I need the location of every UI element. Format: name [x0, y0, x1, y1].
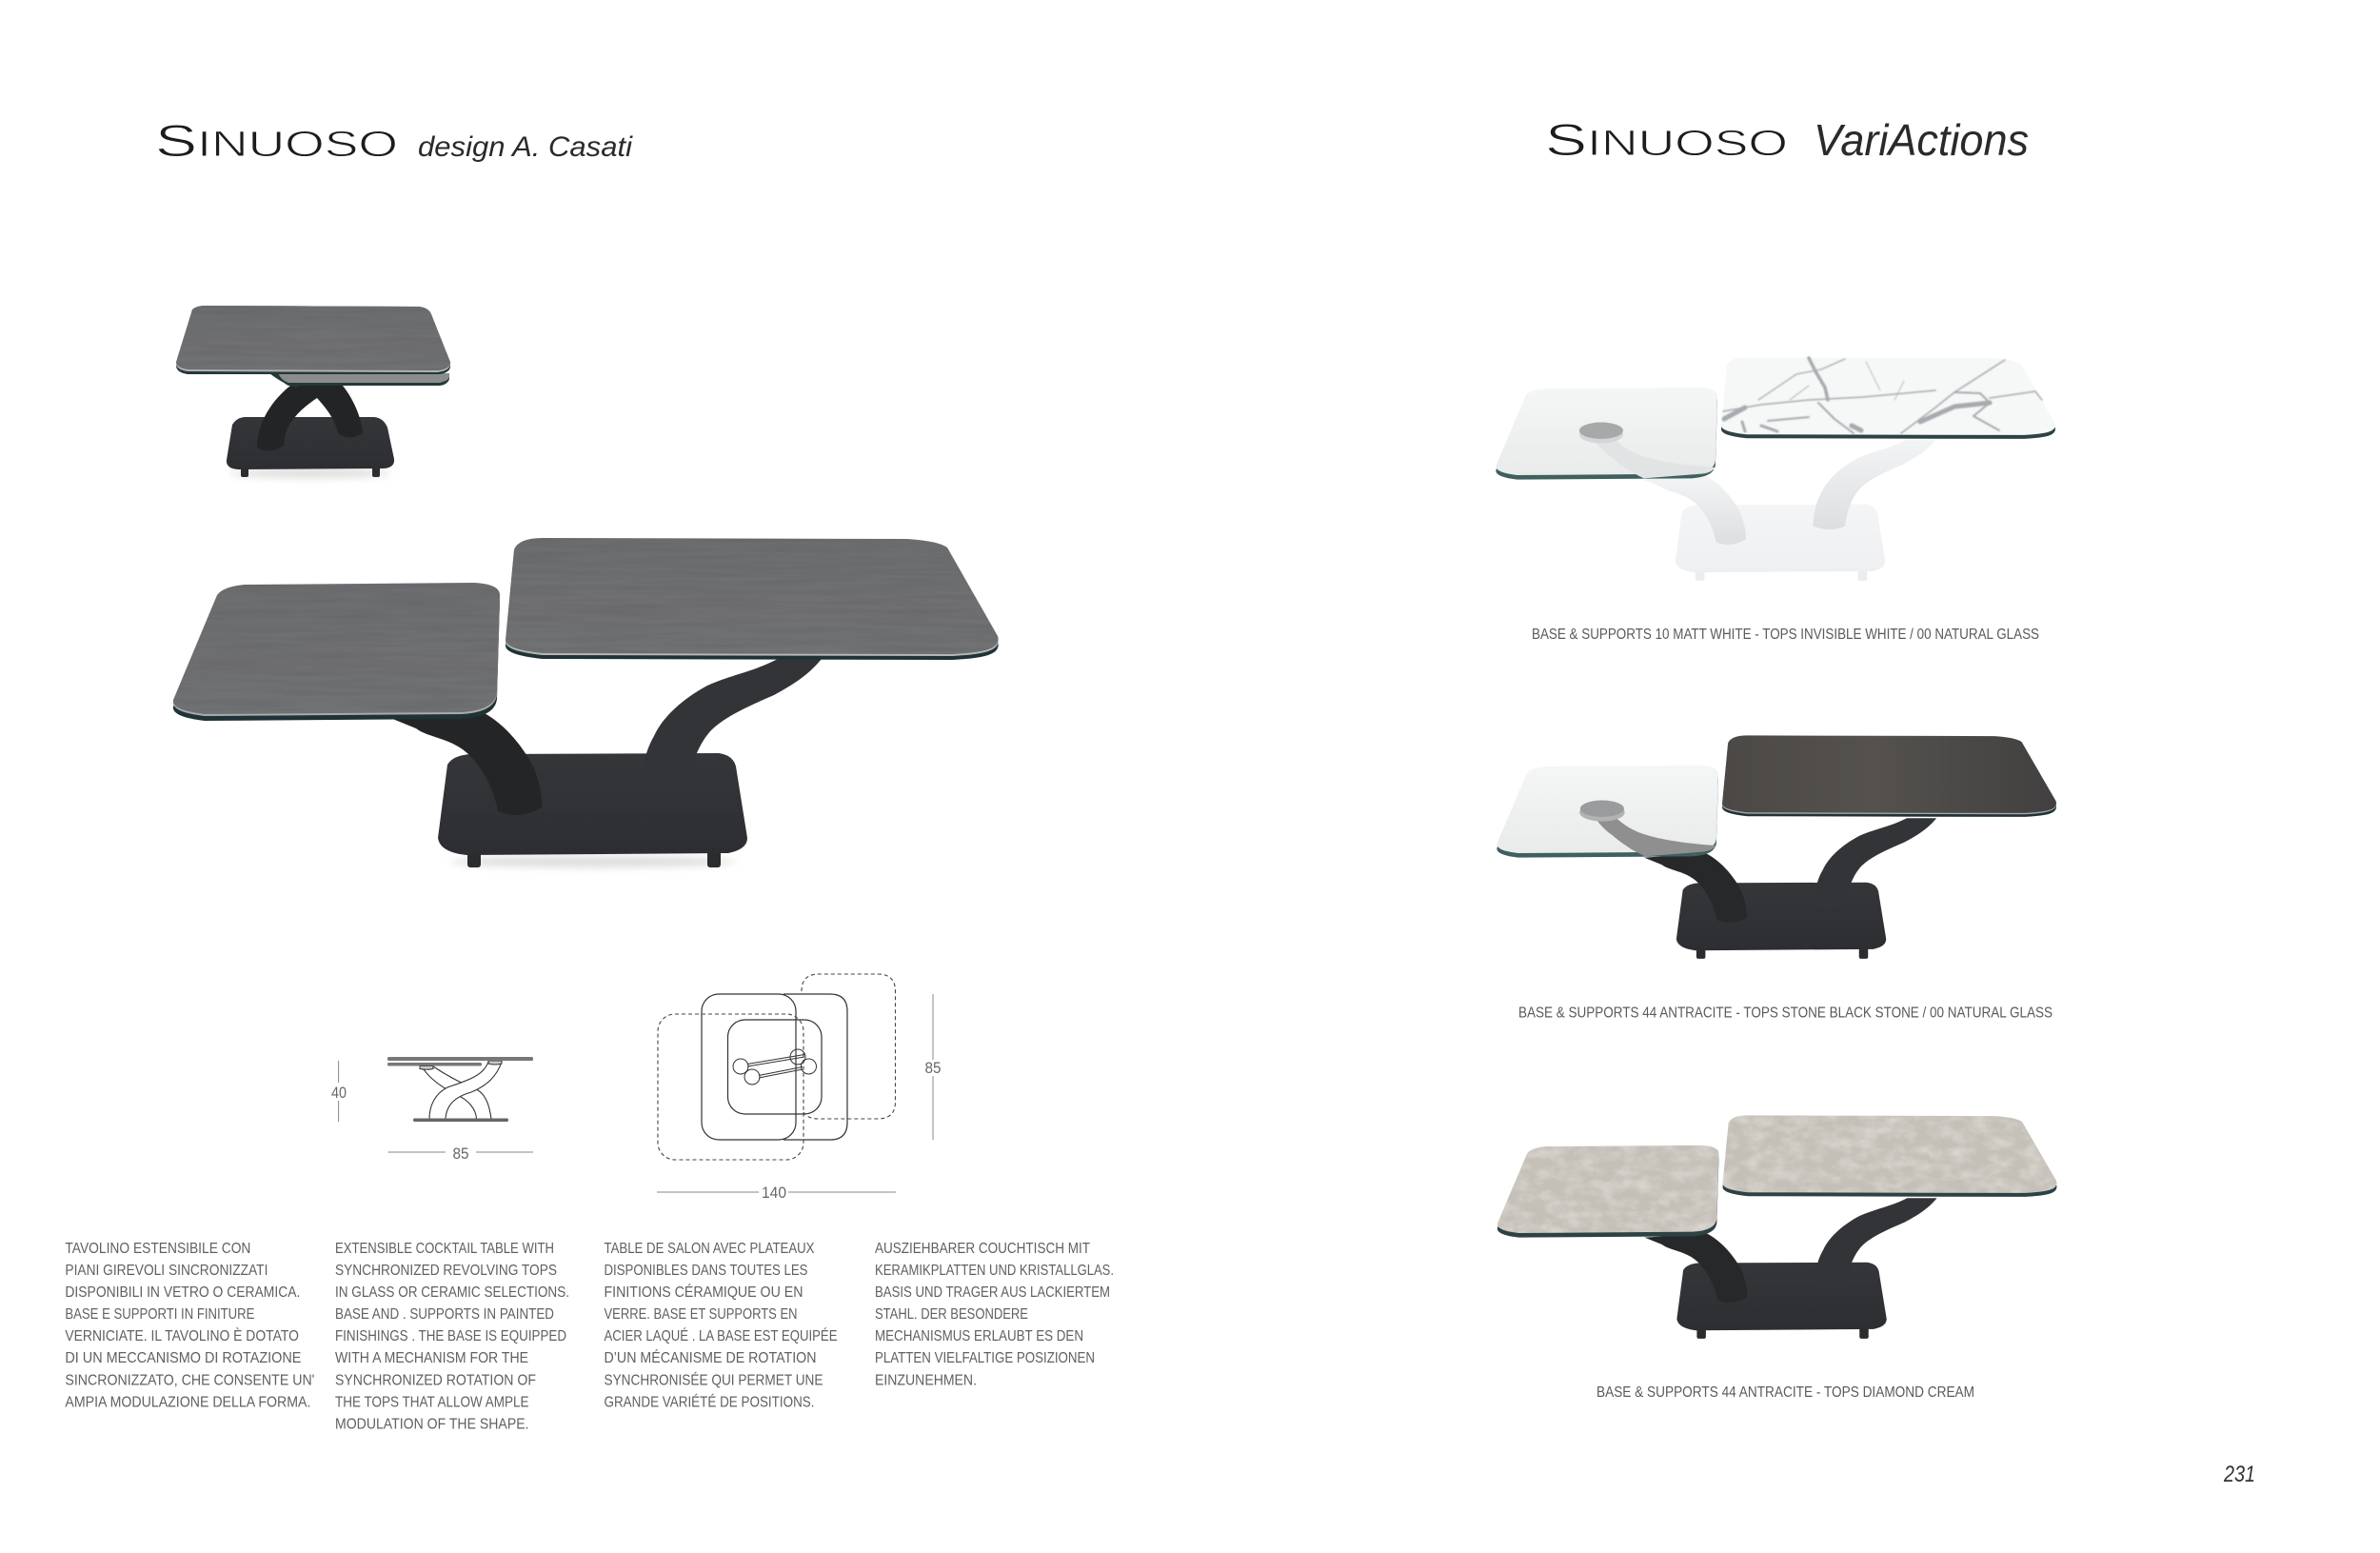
- caption: diamond cream finishes: BASE & SUPPORTS 44 ANTRACITE - TOPS DIAMOND CREAM: [1597, 1384, 1974, 1401]
- text block: French description: VERRE. BASE ET SUPPORTS EN: [604, 1306, 798, 1323]
- text block: German description: AUSZIEHBARER COUCHTISCH MIT: [875, 1241, 1090, 1257]
- text block: Italian description: VERNICIATE. IL TAVOLINO È DOTATO: [65, 1328, 299, 1344]
- text block: French description: TABLE DE SALON AVEC PLATEAUX: [604, 1241, 815, 1257]
- image: anthracite base table with black stone and glass tops: [1497, 735, 2056, 959]
- text block: Italian description: SINCRONIZZATO, CHE CONSENTE UN': [65, 1373, 314, 1388]
- image: anthracite base table with diamond cream tops: [1497, 1115, 2056, 1339]
- dimension: depth 85: 85: [925, 1059, 941, 1077]
- text block: English description: IN GLASS OR CERAMIC SELECTIONS.: [335, 1284, 569, 1301]
- image: open table, dark ceramic tops: [173, 538, 999, 867]
- text block: English description: FINISHINGS . THE BASE IS EQUIPPED: [335, 1328, 566, 1344]
- text block: German description: KERAMIKPLATTEN UND KRISTALLGLAS.: [875, 1263, 1114, 1279]
- title: Sinuoso VariActions: [1545, 114, 2029, 165]
- text block: English description: THE TOPS THAT ALLOW AMPLE: [335, 1394, 529, 1411]
- text block: German description: PLATTEN VIELFALTIGE POSIZIONEN: [875, 1350, 1095, 1366]
- text block: Italian description: [65, 1241, 314, 1411]
- caption: white table finishes: BASE & SUPPORTS 10 MATT WHITE - TOPS INVISIBLE WHITE / 00 NATURAL GLASS: [1532, 627, 2039, 643]
- text block: German description: [875, 1241, 1114, 1388]
- text block: Italian description: BASE E SUPPORTI IN FINITURE: [65, 1306, 254, 1323]
- text block: Italian description: PIANI GIREVOLI SINCRONIZZATI: [65, 1263, 268, 1279]
- drawing: top view rotation diagram with dimensions: [657, 974, 941, 1202]
- text block: Italian description: DI UN MECCANISMO DI ROTAZIONE: [65, 1350, 301, 1366]
- text block: German description: EINZUNEHMEN.: [875, 1373, 977, 1388]
- text block: English description: MODULATION OF THE SHAPE.: [335, 1417, 529, 1432]
- dimension: height 40: 40: [331, 1084, 347, 1102]
- dimension: open width 140: 140: [762, 1184, 786, 1202]
- text block: French description: [604, 1241, 838, 1411]
- page number: 231: [2223, 1462, 2255, 1487]
- text block: English description: WITH A MECHANISM FOR THE: [335, 1350, 528, 1366]
- title: Sinuoso design A. Casati: [155, 115, 633, 166]
- drawing: side elevation with dimensions: [331, 1057, 533, 1163]
- text block: French description: SYNCHRONISÉE QUI PERMET UNE: [604, 1373, 823, 1388]
- text block: French description: FINITIONS CÉRAMIQUE OU EN: [604, 1284, 803, 1301]
- text block: French description: GRANDE VARIÉTÉ DE POSITIONS.: [604, 1394, 815, 1411]
- caption: anthracite table with black stone finishes: BASE & SUPPORTS 44 ANTRACITE - TOPS STONE BLACK STONE / 00 NATURAL GLASS: [1518, 1005, 2053, 1021]
- subheading: VariActions: VariActions: [1814, 115, 2029, 165]
- text block: English description: EXTENSIBLE COCKTAIL TABLE WITH: [335, 1241, 554, 1257]
- text block: English description: SYNCHRONIZED REVOLVING TOPS: [335, 1263, 557, 1279]
- text block: French description: ACIER LAQUÉ . LA BASE EST EQUIPÉE: [604, 1328, 838, 1344]
- subheading: designer: design A. Casati: [418, 131, 633, 163]
- text block: French description: D’UN MÉCANISME DE ROTATION: [604, 1350, 817, 1366]
- text block: English description: [335, 1241, 569, 1432]
- text block: German description: BASIS UND TRAGER AUS LACKIERTEM: [875, 1284, 1110, 1301]
- image: closed cocktail table: [176, 306, 450, 478]
- text block: English description: SYNCHRONIZED ROTATION OF: [335, 1373, 536, 1388]
- text block: Italian description: DISPONIBILI IN VETRO O CERAMICA.: [65, 1284, 300, 1301]
- text block: Italian description: AMPIA MODULAZIONE DELLA FORMA.: [65, 1394, 310, 1411]
- heading: Sinuoso: S INUOSO: [1545, 114, 1788, 165]
- dimension: width 85: 85: [453, 1145, 468, 1163]
- text block: Italian description: TAVOLINO ESTENSIBILE CON: [65, 1241, 250, 1257]
- text block: French description: DISPONIBLES DANS TOUTES LES: [604, 1263, 807, 1279]
- text block: German description: STAHL. DER BESONDERE: [875, 1306, 1028, 1323]
- text block: German description: MECHANISMUS ERLAUBT ES DEN: [875, 1328, 1083, 1344]
- heading: Sinuoso: S INUOSO: [155, 115, 398, 166]
- text block: English description: BASE AND . SUPPORTS IN PAINTED: [335, 1306, 554, 1323]
- image: white base table with marble and glass tops: [1496, 357, 2055, 581]
